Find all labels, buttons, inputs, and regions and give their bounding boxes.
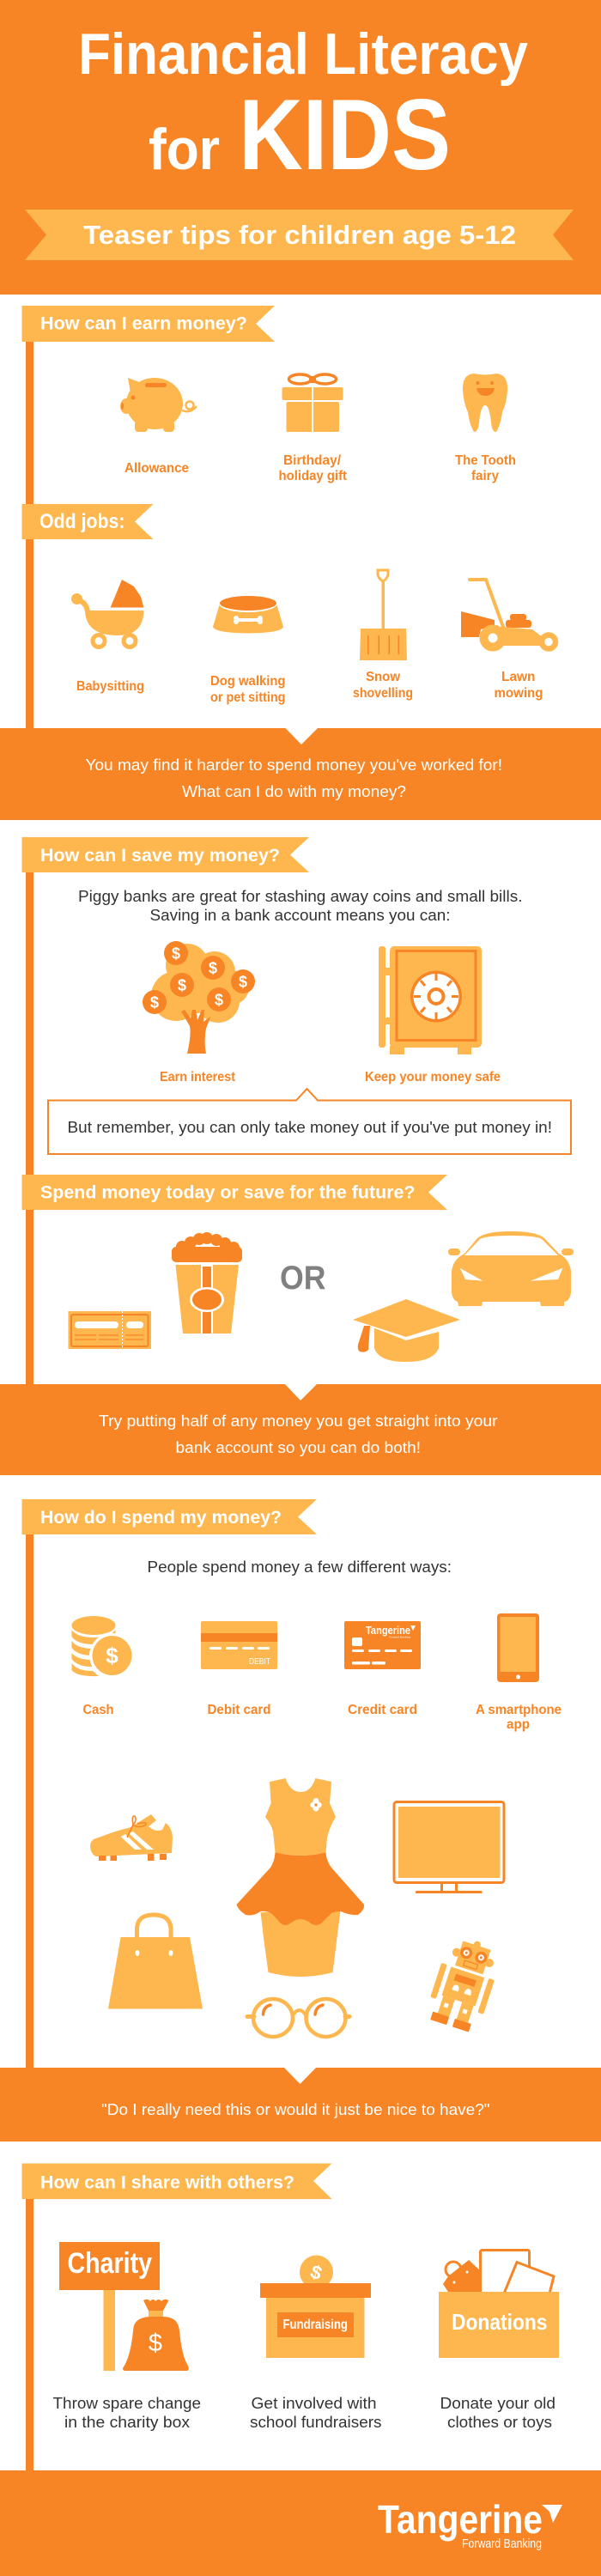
icon: charity sign and bag: $ — [149, 2330, 162, 2357]
icon: fundraising box — [260, 2255, 371, 2358]
heading: how can I earn money: How can I earn money? — [40, 313, 247, 333]
header panel — [0, 0, 601, 295]
icon: cash — [72, 1616, 134, 1678]
label: tooth fairy — [455, 453, 516, 483]
heading: how can I share with others — [22, 2164, 331, 2199]
icon: popcorn — [172, 1232, 242, 1334]
label: lawn mowing — [495, 670, 543, 701]
label: allowance: Allowance — [124, 461, 189, 476]
text: donate your old clothes — [440, 2394, 555, 2431]
icon: monitor — [394, 1801, 504, 1893]
icon: car — [448, 1231, 574, 1306]
title: Financial Literacy — [78, 21, 528, 87]
text: piggy banks intro — [78, 887, 522, 924]
label: credit card: Credit card — [348, 1703, 417, 1717]
text: get involved — [250, 2394, 381, 2431]
label: cash: Cash — [82, 1703, 113, 1717]
icon: soccer shoe — [90, 1814, 173, 1861]
icon: dress — [237, 1778, 364, 1977]
icon: money tree: $ — [209, 960, 217, 977]
band: half your money: bank account so you can do both! — [175, 1438, 421, 1456]
label: earn interest: Earn interest — [160, 1070, 235, 1084]
text: or: OR — [280, 1260, 326, 1297]
icon: charity sign and bag: Charity — [67, 2247, 152, 2280]
icon: credit card: Tangerine — [366, 1624, 410, 1637]
logo: tangerine: Forward Banking — [462, 2537, 542, 2551]
label: smartphone app: A smartphone — [476, 1703, 562, 1717]
text: throw spare change: Throw spare change — [53, 2394, 201, 2412]
icon: stroller — [71, 580, 143, 647]
icon: credit card — [344, 1621, 421, 1669]
logo: tangerine: Tangerine — [378, 2497, 543, 2542]
icon: lawn mower — [461, 580, 555, 650]
icon: smartphone — [497, 1613, 539, 1682]
icon: donations box: Donations — [452, 2309, 548, 2335]
band: half your money: Try putting half of any money you get straight into your — [99, 1412, 498, 1430]
text: people spend money: People spend money a few different ways: — [148, 1558, 452, 1576]
band: need or nice to have: "Do I really need this or would it just be nice to have?" — [101, 2100, 489, 2118]
label: snow shovelling — [353, 670, 413, 701]
heading: spend or save: Spend money today or save for the future? — [40, 1182, 416, 1202]
icon: donations box — [439, 2250, 559, 2358]
icon: cash: $ — [106, 1643, 118, 1668]
icon: safe — [379, 946, 482, 1054]
title: KIDS — [239, 78, 451, 191]
heading: odd jobs: Odd jobs: — [39, 510, 125, 533]
text: throw spare change — [53, 2394, 201, 2431]
icon: money tree: $ — [172, 945, 180, 962]
label: debit card: Debit card — [208, 1703, 271, 1717]
text: piggy banks intro: Piggy banks are great for stashing away coins and small bills. — [78, 887, 522, 905]
text: throw spare change: in the charity box — [64, 2413, 191, 2431]
text: get involved: Get involved with — [251, 2394, 376, 2412]
title: for — [149, 117, 220, 182]
icon: money tree: $ — [215, 991, 223, 1008]
band: spend money worked for: What can I do with my money? — [182, 782, 406, 800]
footer panel — [0, 2470, 601, 2576]
heading: how do I spend my money — [22, 1499, 317, 1534]
heading: how can I save my money: How can I save my money? — [40, 845, 280, 866]
label: dog walking: Dog walking — [210, 674, 285, 689]
icon: debit card: DEBIT — [249, 1657, 270, 1667]
label: snow shovelling: shovelling — [353, 686, 413, 701]
heading: how can I save my money — [22, 837, 309, 872]
icon: money tree: $ — [239, 974, 247, 991]
callout: only take money out: But remember, you can only take money out if you've put money in! — [67, 1118, 552, 1136]
poles — [26, 335, 33, 2477]
band: half your money — [0, 1384, 601, 1475]
icon: handbag — [108, 1915, 203, 2009]
icon: fundraising box: $ — [307, 2261, 325, 2284]
label: birthday gift — [278, 453, 347, 483]
icon: gift — [282, 374, 343, 432]
icon: dog bowl — [213, 595, 283, 634]
icon: movie ticket — [69, 1311, 151, 1349]
icon: fundraising box: Fundraising — [283, 2318, 348, 2332]
label: lawn mowing: mowing — [495, 686, 543, 701]
label: snow shovelling: Snow — [366, 670, 401, 684]
heading: spend or save — [22, 1175, 447, 1210]
label: birthday gift: Birthday/ — [283, 453, 342, 468]
icon: piggy bank — [120, 378, 197, 432]
heading: odd jobs — [22, 504, 153, 539]
label: smartphone app — [476, 1703, 562, 1732]
icon: money tree — [143, 941, 255, 1054]
label: birthday gift: holiday gift — [278, 469, 347, 483]
text: donate your old clothes: Donate your old — [440, 2394, 555, 2412]
heading: how can I share with others: How can I share with others? — [40, 2172, 294, 2193]
callout: only take money out — [48, 1089, 571, 1154]
icon: graduation cap — [353, 1299, 460, 1362]
label: babysitting: Babysitting — [76, 679, 144, 694]
band: need or nice to have — [0, 2068, 601, 2142]
icon: tooth — [463, 374, 507, 432]
label: tooth fairy: fairy — [471, 469, 499, 483]
title — [78, 21, 528, 191]
icon: charity sign and bag — [59, 2242, 189, 2371]
text: piggy banks intro: Saving in a bank account means you can: — [149, 906, 450, 924]
label: smartphone app: app — [507, 1717, 530, 1732]
icon: shovel — [360, 570, 407, 660]
label: dog walking — [210, 674, 285, 705]
icon: credit card: Forward Banking — [389, 1635, 410, 1638]
label: lawn mowing: Lawn — [501, 670, 536, 684]
icon: debit card — [201, 1621, 277, 1669]
text: donate your old clothes: clothes or toys — [447, 2413, 552, 2431]
icon: glasses — [247, 1999, 349, 2037]
icon: robot — [423, 1933, 504, 2035]
band: spend money worked for — [0, 728, 601, 820]
label: tooth fairy: The Tooth — [455, 453, 516, 468]
band: spend money worked for: You may find it harder to spend money you've worked for! — [86, 756, 502, 774]
heading: how can I earn money — [22, 306, 275, 342]
text: get involved: school fundraisers — [250, 2413, 381, 2431]
icon: money tree: $ — [178, 977, 186, 994]
subtitle ribbon: Teaser tips for children age 5-12 — [83, 220, 516, 250]
heading: how do I spend my money: How do I spend my money? — [40, 1507, 282, 1528]
label: dog walking: or pet sitting — [210, 690, 285, 705]
icon: money tree: $ — [150, 994, 159, 1012]
label: keep your money safe: Keep your money safe — [365, 1070, 501, 1084]
subtitle ribbon — [25, 210, 574, 260]
